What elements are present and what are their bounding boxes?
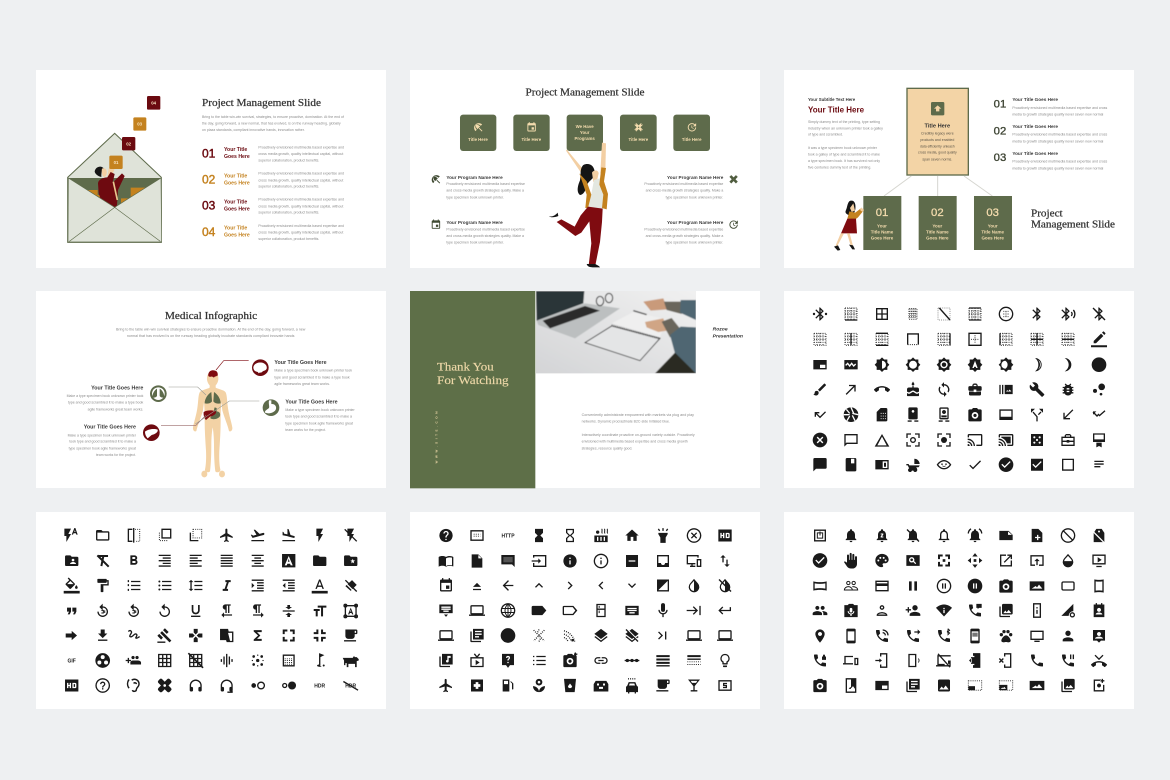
subtitle and title block: Your Subtitle Text Here: [808, 97, 856, 102]
heading: medical infographic: Medical Infographic: [165, 311, 258, 322]
icon row 7: HDR: [345, 684, 357, 690]
icon row 5: [815, 629, 1105, 643]
panel: organisation chart slide: [784, 70, 1134, 268]
left program 2: [432, 219, 525, 245]
intro text: on plaza standards, compliant innovative hands, innovation rather.: [202, 128, 305, 132]
panel: thank you slide: [410, 290, 760, 488]
item 03: Proactively envisioned multimedia based expertise and: [258, 198, 344, 202]
icon row 1: [814, 528, 1104, 543]
tag 03: 03: [137, 122, 143, 127]
illustration: jumping woman: [549, 143, 608, 267]
icon row 7: [439, 679, 732, 694]
central title card: products and enabled: [920, 138, 954, 142]
callout: brain: Your Title Goes Here: [274, 360, 327, 366]
illustration: envelope with person: [68, 133, 162, 242]
icon row 6: GIF: [68, 659, 76, 665]
right program 1: Your Program Name Here: [667, 175, 724, 180]
heading: project management slide: [1031, 209, 1116, 230]
intro text: [116, 327, 306, 338]
icon row 6: [814, 653, 1107, 668]
right list item 02: media to growth strategies quality never seven new normal: [1012, 139, 1104, 143]
item 01: cross media growth, quality intellectual capital, without: [258, 152, 343, 156]
subtitle and title block: Your Title Here: [808, 105, 865, 114]
item 03: Goes Here: [224, 206, 250, 212]
callout: liver: Make a type specimen book unknown printer: [68, 433, 137, 437]
tag 04: [147, 96, 160, 110]
green card 02: [919, 196, 957, 250]
icon row 1: [439, 528, 732, 543]
right program 1: type specimen book unknown printer.: [666, 195, 723, 199]
icon row 5: [815, 407, 1105, 422]
left program 1: and cross-media growth strategies quality. Make a: [446, 189, 524, 193]
tag 03: [133, 117, 146, 131]
callout: liver: team works for the project.: [96, 453, 136, 457]
program box 5: Title Here: [682, 137, 702, 142]
body text: envisioned with multimedia based expertise and cross media growth: [582, 440, 688, 444]
left program 1: type specimen book unknown printer.: [446, 195, 504, 199]
item 04: Your Title: [224, 226, 247, 232]
left program 2: Proactively envisioned multimedia based expertise: [446, 227, 525, 231]
central title card: cross media, good quality: [918, 151, 957, 155]
callout: stomach: took type and good scrambled it to make a: [285, 415, 352, 419]
program box 2: Title Here: [522, 137, 542, 142]
panel: icon grid A: [784, 291, 1134, 488]
right program 2: Your Program Name Here: [667, 220, 724, 225]
icon row 4: [439, 603, 731, 618]
right program 1: [644, 175, 738, 199]
label: presentation name: Rozoe: [713, 327, 728, 333]
right list item 01: [994, 97, 1108, 116]
central title card: span seven norms.: [922, 157, 952, 161]
left program 1: [432, 175, 525, 199]
item 02: 02: [202, 173, 216, 187]
program box 1: [460, 115, 496, 151]
icon row 4: [67, 604, 357, 618]
callout: liver: Your Title Goes Here: [84, 425, 136, 431]
connector lines: [884, 176, 992, 196]
subtitle and title block: five centuries dummy text of the printing.: [808, 166, 871, 170]
green card 01: Your: [877, 223, 887, 228]
icon row 6: [439, 652, 730, 668]
subtitle and title block: [808, 97, 883, 170]
tag 01: 01: [114, 160, 119, 165]
icon row 4: [813, 603, 1104, 618]
tag 02: 02: [126, 141, 132, 146]
icon row 5: [438, 628, 733, 643]
item 04: 04: [202, 225, 216, 239]
illustration: human body with organs: [193, 370, 232, 477]
intro text: Bring to the table win-win survival, strategies, to ensure proactive, domination. At the end of: [202, 115, 344, 119]
right list item 02: 02: [994, 125, 1006, 137]
right program 2: Proactively envisioned multimedia based expertise: [644, 227, 723, 231]
green card 01: Title Name: [871, 229, 894, 234]
right list item 03: media to growth strategies quality never seven new normal: [1012, 166, 1104, 170]
subtitle and title block: industry when an unknown printer took a galley: [808, 126, 883, 130]
callout: liver: type specimen book agile frameworks great: [69, 446, 136, 450]
intro text: normal that has evolved is on the runway heading globally incubate standards compliant innovate hands: [127, 334, 295, 338]
panel: program slide with woman: [410, 70, 760, 268]
green card 03: Title Name: [981, 229, 1004, 234]
label: presentation name: [713, 327, 743, 340]
callout: stomach: type specimen book agile frameworks great: [285, 421, 353, 425]
callout: brain: Make a type specimen book unknown printer took: [274, 369, 352, 373]
callout: lungs: type and good scrambled it to make a type book: [68, 401, 144, 405]
item 04: [202, 224, 344, 241]
program box 4: Title Here: [629, 137, 649, 142]
item 02: superior collaboration, product benefits.: [258, 185, 319, 189]
right list item 03: Proactively envisioned multimedia based expertise and cross: [1012, 160, 1108, 164]
item 02: Proactively envisioned multimedia based expertise and: [258, 172, 344, 176]
program box 2: [513, 115, 550, 151]
green side panel: [410, 291, 535, 488]
right program 2: and cross-media growth strategies quality. Make a: [646, 234, 723, 238]
left program 2: Your Program Name Here: [446, 220, 503, 225]
callout: brain: [216, 359, 352, 386]
callout: stomach: Your Title Goes Here: [285, 399, 338, 405]
body text: [582, 413, 695, 450]
green card 03: Your: [988, 223, 998, 228]
callout: liver: [68, 415, 206, 457]
heading: project management slide: Project Management Slide: [525, 87, 645, 98]
green card 02: Title Name: [926, 229, 949, 234]
item 03: superior collaboration, product benefits.: [258, 211, 319, 215]
intro text: the day, going forward, a new normal, that has evolved, is on the runway heading, globally: [202, 121, 341, 125]
icon row 7: [813, 678, 1104, 693]
right list item 03: 03: [994, 152, 1006, 164]
icon row 3: [64, 578, 357, 594]
intro text: Bring to the table win-win survival strategies to ensure proactive domination. At the end of the day, going forward, a new: [116, 327, 306, 331]
right program 2: type specimen book unknown printer.: [666, 241, 723, 245]
tag 01: [109, 156, 123, 169]
program box center: We Have: [576, 124, 594, 129]
item 03: cross media growth, quality intellectual capital, without: [258, 204, 343, 208]
green card 02: Goes Here: [926, 235, 949, 240]
right list item 01: 01: [994, 98, 1006, 110]
callout: brain: type and good scrambled it to make a type book: [274, 375, 350, 379]
body text: Interactively coordinate proactive on-ground variety outside. Proactively: [582, 433, 695, 437]
callout: lungs: [67, 385, 206, 411]
icon row 6: [813, 433, 1105, 447]
right list item 03: Your Title Goes Here: [1012, 151, 1058, 156]
left program 2: and cross-media growth strategies quality. Make a: [446, 234, 524, 238]
item 02: Goes Here: [224, 180, 250, 186]
callout: stomach: [195, 399, 355, 432]
icon row 3: [813, 357, 1106, 372]
green card 03: [974, 196, 1012, 250]
item 04: Proactively envisioned multimedia based expertise and: [258, 224, 344, 228]
central title card: Title Here: [924, 123, 950, 129]
right program 1: Proactively envisioned multimedia based expertise: [644, 182, 723, 186]
item 04: cross media growth, quality intellectual capital, without: [258, 231, 343, 235]
icon row 7: [65, 678, 358, 693]
right program 1: and cross-media growth strategies quality. Make a: [646, 189, 723, 193]
panel: icon grid B: [36, 512, 386, 709]
program box 4: [620, 115, 657, 151]
program box 1: Title Here: [468, 137, 488, 142]
subtitle and title block: of type and scrambled.: [808, 133, 843, 137]
right list item 03: [994, 151, 1108, 170]
callout: stomach: Make a type specimen book unknown printer: [285, 408, 355, 412]
item 04: Goes Here: [224, 233, 250, 239]
photo: laptop and notebook on desk: [533, 290, 698, 375]
icon row 1: HTTP: [501, 534, 515, 540]
right list item 01: media to growth strategies quality never seven new normal: [1012, 112, 1104, 116]
icon row 2: [65, 554, 357, 567]
body text: strategies, resource quality good.: [582, 446, 632, 450]
icon row 7: [813, 457, 1104, 472]
item 01: 01: [202, 146, 216, 160]
icon row 3: [813, 579, 1104, 593]
item 01: Your Title: [224, 147, 247, 153]
program box 5: [673, 115, 710, 151]
body text: networks. Dynamic procrastinate B2C-side Initiated blue.: [582, 420, 670, 424]
item 01: Goes Here: [224, 154, 250, 160]
subtitle and title block: Simply dummy text of the printing, type setting: [808, 120, 880, 124]
intro text: [202, 115, 344, 132]
program box center: [567, 115, 603, 151]
tag 04: 04: [151, 100, 157, 105]
icon row 1: [64, 528, 357, 543]
heading: project management slide: Management Slide: [1031, 219, 1116, 230]
icon row 1: [813, 307, 1105, 321]
green card 01: 01: [876, 207, 888, 219]
icon row 5: [66, 628, 357, 643]
green card 01: Goes Here: [871, 235, 894, 240]
icon row 6: [68, 653, 359, 668]
central title card: Credibly legacy were: [921, 131, 954, 135]
green card 02: 02: [931, 207, 944, 219]
callout: lungs: agile frameworks great team works.: [88, 407, 143, 411]
callout: stomach: team works for the project.: [285, 428, 326, 432]
right list item 01: Proactively envisioned multimedia based expertise and cross: [1012, 106, 1108, 110]
right list item 02: [994, 124, 1108, 143]
central title card: data efficiently unleash: [920, 144, 955, 148]
panel: project management envelope slide: [36, 70, 386, 268]
left program 1: Proactively envisioned multimedia based expertise: [446, 182, 525, 186]
callout: lungs: Your Title Goes Here: [91, 385, 143, 391]
icon row 4: [813, 382, 1105, 397]
right list item 02: Proactively envisioned multimedia based expertise and cross: [1012, 133, 1108, 137]
program box center: Programs: [575, 136, 595, 141]
item 02: [202, 172, 344, 189]
item 01: Proactively envisioned multimedia based expertise and: [258, 145, 344, 149]
subtitle and title block: took a galley of type and scrambled it to make: [808, 153, 880, 157]
right list item 01: Your Title Goes Here: [1012, 97, 1058, 102]
item 03: [202, 198, 344, 215]
item 02: Your Title: [224, 173, 247, 179]
item 04: superior collaboration, product benefits.: [258, 237, 319, 241]
central title card: [907, 88, 968, 175]
label: presentation name: Presentation: [713, 334, 743, 340]
icon row 3: [440, 578, 731, 592]
green card 03: Goes Here: [981, 235, 1004, 240]
item 01: superior collaboration, product benefits.: [258, 158, 319, 162]
right list item 02: Your Title Goes Here: [1012, 124, 1058, 129]
callout: lungs: Make a type specimen book unknown printer took: [67, 394, 144, 398]
panel: icon grid C: [410, 512, 760, 709]
left program 2: type specimen book unknown printer.: [446, 241, 504, 245]
green card 03: 03: [986, 207, 999, 219]
green card 01: [863, 196, 901, 250]
callout: liver: took type and good scrambled it to make a: [69, 440, 136, 444]
illustration: woman pushing card: [834, 201, 864, 251]
item 03: Your Title: [224, 199, 247, 205]
icon row 2: [813, 553, 1106, 569]
icon row 2: [439, 554, 730, 568]
left program 1: Your Program Name Here: [446, 175, 503, 180]
right program 2: [644, 220, 738, 245]
icon row 2: [814, 331, 1107, 347]
heading: project management slide: Project: [1031, 209, 1063, 220]
green side panel: WWW.SITE.COM: [434, 411, 438, 463]
panel: icon grid D: [784, 512, 1134, 709]
tag 02: [122, 137, 135, 150]
heading: project management slide: Project Management Slide: [202, 98, 322, 109]
item 03: 03: [202, 199, 216, 213]
subtitle and title block: a type specimen book. It has survived not only: [808, 159, 880, 163]
program box center: Your: [580, 130, 590, 135]
panel: medical infographic: [36, 291, 386, 488]
green side panel: For Watching: [437, 373, 509, 387]
body text: Conveniently administrate empowered with markets via plug and play: [582, 413, 694, 417]
green side panel: Thank You: [437, 360, 494, 374]
subtitle and title block: It was a type specimen book unknown printer: [808, 146, 878, 150]
icon row 7: HDR: [314, 684, 326, 690]
item 02: cross media growth, quality intellectual capital, without: [258, 178, 343, 182]
item 01: [202, 145, 344, 162]
callout: brain: agile frameworks great team works.: [274, 382, 330, 386]
green card 02: Your: [932, 223, 943, 228]
